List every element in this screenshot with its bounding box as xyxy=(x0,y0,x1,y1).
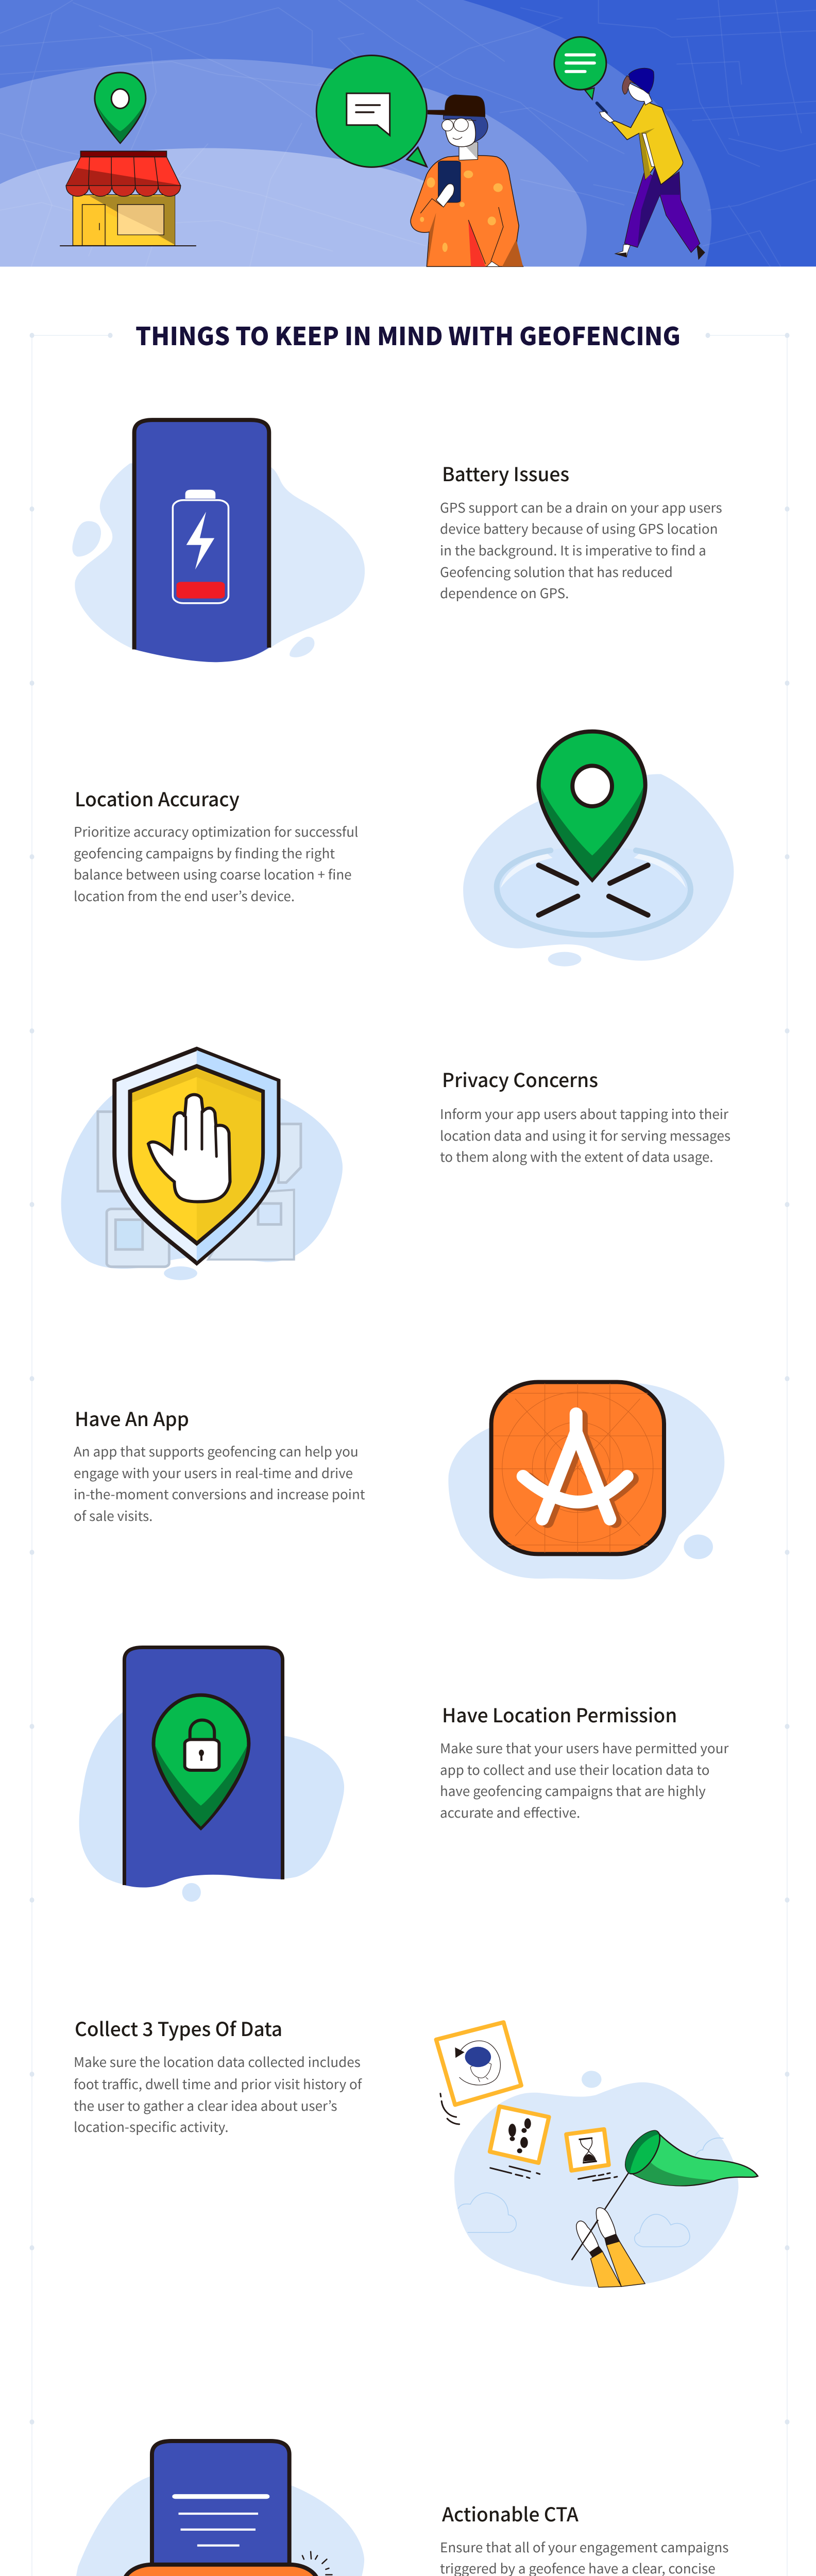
body: balance between using coarse location + fine xyxy=(74,865,352,884)
body: app to collect and use their location data to xyxy=(440,1760,709,1779)
body: in-the-moment conversions and increase point xyxy=(74,1484,365,1503)
heading: Collect 3 Types Of Data xyxy=(75,2014,282,2042)
card: dwell time xyxy=(566,2129,617,2181)
card: foot traffic xyxy=(490,2107,549,2178)
illustration: phone with low battery xyxy=(72,420,365,662)
body: the user to gather a clear idea about user’s xyxy=(74,2096,337,2115)
panel: have location permission xyxy=(79,1647,729,1902)
person with phone and chat bubble xyxy=(316,55,523,266)
illustration: phone with tapped button xyxy=(74,2441,364,2576)
chat bubble xyxy=(316,55,427,167)
body: of sale visits. xyxy=(74,1506,152,1525)
body: Make sure that your users have permitted your xyxy=(440,1738,729,1757)
body: accurate and effective. xyxy=(440,1803,580,1822)
icon: low battery xyxy=(173,489,228,603)
body: foot traffic, dwell time and prior visit history of xyxy=(74,2074,363,2093)
body: have geofencing campaigns that are highly xyxy=(440,1781,706,1800)
heading: Have An App xyxy=(75,1404,189,1432)
body: engage with your users in real-time and drive xyxy=(74,1463,353,1482)
panel: actionable CTA xyxy=(74,2441,728,2576)
card: prior visit history xyxy=(436,2022,521,2124)
body: location from the end user’s device. xyxy=(74,886,295,905)
body: An app that supports geofencing can help you xyxy=(74,1442,359,1461)
message bubble xyxy=(554,37,606,99)
icon: store xyxy=(60,151,196,246)
hero banner xyxy=(0,0,816,266)
body: to them along with the extent of data usage. xyxy=(440,1147,713,1166)
body: Make sure the location data collected includes xyxy=(74,2052,361,2071)
net xyxy=(572,2131,758,2260)
body: location data and using it for serving messages xyxy=(440,1126,730,1145)
panel: collect 3 types of data xyxy=(74,2014,758,2287)
panel: battery issues xyxy=(72,420,722,662)
text: battery issues xyxy=(440,459,722,602)
illustration: app icon xyxy=(448,1382,724,1580)
text: location accuracy xyxy=(74,784,358,905)
body: Ensure that all of your engagement campaigns xyxy=(440,2537,728,2556)
button xyxy=(123,2552,332,2576)
text: collect 3 types of data xyxy=(74,2014,363,2136)
illustration: map pin on target xyxy=(463,732,734,967)
heading: Have Location Permission xyxy=(442,1700,677,1728)
heading: Privacy Concerns xyxy=(442,1065,598,1093)
text: have an app xyxy=(74,1404,365,1525)
body: geofencing campaigns by finding the right xyxy=(74,843,335,862)
heading: Battery Issues xyxy=(442,459,569,487)
body: Geofencing solution that has reduced xyxy=(440,562,673,581)
illustration: net catching data cards xyxy=(436,2022,758,2287)
panel: privacy concerns xyxy=(61,1049,730,1280)
legs xyxy=(576,2208,645,2287)
body: in the background. It is imperative to find a xyxy=(440,540,706,560)
body: dependence on GPS. xyxy=(440,583,569,602)
body: location-specific activity. xyxy=(74,2117,229,2136)
heading: Location Accuracy xyxy=(75,784,240,812)
icon: location pin above store xyxy=(95,73,146,143)
icon: hand xyxy=(148,1095,230,1201)
heading: Actionable CTA xyxy=(442,2499,579,2527)
illustration: phone with locked pin xyxy=(79,1647,344,1902)
body: Inform your app users about tapping into their xyxy=(440,1104,729,1123)
body: device battery because of using GPS location xyxy=(440,519,718,538)
text: have location permission xyxy=(440,1700,729,1822)
illustration: shield with raised hand xyxy=(61,1049,343,1280)
body: Prioritize accuracy optimization for successful xyxy=(74,822,358,841)
text: actionable CTA xyxy=(440,2499,728,2576)
text: privacy concerns xyxy=(440,1065,730,1166)
panel: have an app xyxy=(74,1382,724,1580)
title: THINGS TO KEEP IN MIND WITH GEOFENCING xyxy=(135,316,681,352)
icon: pin with padlock xyxy=(154,1695,249,1828)
panel: location accuracy xyxy=(74,732,734,967)
person walking with phone and message bubble xyxy=(554,37,705,260)
body: GPS support can be a drain on your app users xyxy=(440,498,722,517)
